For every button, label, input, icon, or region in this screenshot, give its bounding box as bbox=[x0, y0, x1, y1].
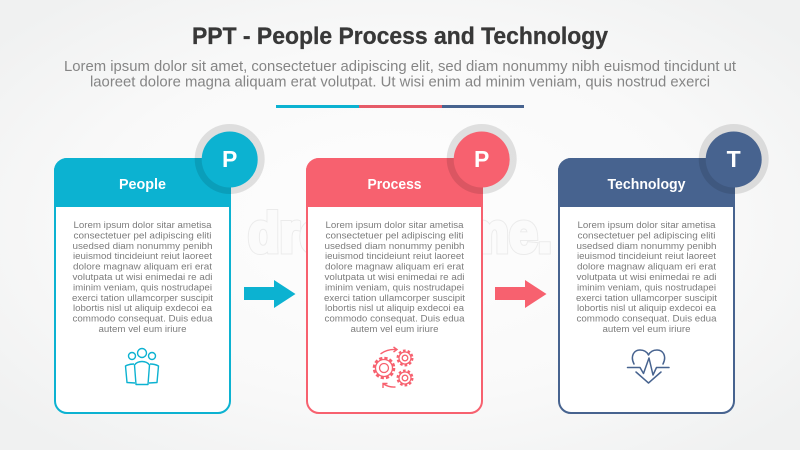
subtitle: Lorem ipsum dolor sit amet, consectetuer adipiscing elit, sed diam nonummy nibh euismod tincidunt ut bbox=[64, 59, 736, 75]
text block: process: usedsed diam nonummy penibh bbox=[324, 241, 464, 252]
text block: process: Lorem ipsum dolor sitar ametisa bbox=[326, 220, 464, 231]
text block: people: volutpata ut wisi enimedai re adi bbox=[72, 272, 212, 283]
icon: gears bbox=[374, 347, 412, 388]
heading: people: People bbox=[119, 176, 166, 193]
badge: process: P bbox=[474, 146, 489, 172]
text block: process: exerci tation ullamcorper suscipit bbox=[324, 293, 465, 304]
text block: process: lobortis nisl ut aliquip exdecoi ea bbox=[325, 303, 465, 314]
badge: process bbox=[447, 124, 517, 194]
text block: people bbox=[72, 220, 213, 335]
text block: process: commodo consequat. Duis edua bbox=[324, 314, 465, 325]
text block: process: ieuismod tincideiunt reiut laoreet bbox=[325, 251, 464, 262]
text block: technology: autem vel eum iriure bbox=[602, 324, 690, 335]
panel: technology bbox=[558, 124, 769, 413]
text block: people: usedsed diam nonummy penibh bbox=[72, 241, 212, 252]
icon: heart pulse bbox=[628, 350, 669, 383]
text block: people: autem vel eum iriure bbox=[98, 324, 186, 335]
text block: people: ieuismod tincideiunt reiut laoreet bbox=[73, 251, 212, 262]
text block: people: lobortis nisl ut aliquip exdecoi ea bbox=[73, 303, 213, 314]
text block: technology: commodo consequat. Duis edua bbox=[576, 314, 717, 325]
text block: technology: exerci tation ullamcorper suscipit bbox=[576, 293, 717, 304]
text block: process: autem vel eum iriure bbox=[350, 324, 438, 335]
text block: technology: usedsed diam nonummy penibh bbox=[576, 241, 716, 252]
text block: people: dolore magnaw aliquam eri erat bbox=[73, 262, 212, 273]
text block: technology: dolore magnaw aliquam eri erat bbox=[577, 262, 716, 273]
subtitle bbox=[64, 59, 736, 90]
subtitle: laoreet dolore magna aliquam erat volutpat. Ut wisi enim ad minim veniam, quis nostrud exerci bbox=[90, 74, 710, 90]
badge: people: P bbox=[222, 146, 237, 172]
heading: technology: Technology bbox=[608, 176, 686, 193]
text block: process: dolore magnaw aliquam eri erat bbox=[325, 262, 464, 273]
text block: people: Lorem ipsum dolor sitar ametisa bbox=[74, 220, 212, 231]
header: technology bbox=[558, 158, 735, 207]
text block: technology: lobortis nisl ut aliquip exdecoi ea bbox=[577, 303, 717, 314]
text block: process: volutpata ut wisi enimedai re adi bbox=[324, 272, 464, 283]
heading: process: Process bbox=[368, 176, 422, 193]
watermark: dreamstime. bbox=[248, 201, 552, 264]
text block: process: iminim veniam, quis nostrudapei bbox=[325, 282, 464, 293]
badge: technology bbox=[699, 124, 769, 194]
text block: technology: Lorem ipsum dolor sitar ametisa bbox=[578, 220, 716, 231]
text block: people: iminim veniam, quis nostrudapei bbox=[73, 282, 212, 293]
text block: technology: volutpata ut wisi enimedai re adi bbox=[576, 272, 716, 283]
text block: technology: consectetuer pel adipiscing eliti bbox=[578, 230, 716, 241]
text block: process: consectetuer pel adipiscing eliti bbox=[326, 230, 464, 241]
text block: people: exerci tation ullamcorper suscipit bbox=[72, 293, 213, 304]
panel: people bbox=[54, 124, 265, 413]
header: people bbox=[54, 158, 231, 207]
text block: technology: ieuismod tincideiunt reiut laoreet bbox=[577, 251, 716, 262]
header: process bbox=[306, 158, 483, 207]
watermark: dreamstime. bbox=[248, 201, 552, 264]
text block: technology: iminim veniam, quis nostrudapei bbox=[577, 282, 716, 293]
text block: technology bbox=[576, 220, 717, 335]
arrow: process to technology bbox=[495, 280, 546, 308]
text block: process bbox=[324, 220, 465, 335]
badge: people bbox=[195, 124, 265, 194]
panel: process bbox=[306, 124, 517, 413]
badge: technology: T bbox=[727, 146, 741, 172]
title: PPT - People Process and Technology bbox=[192, 23, 608, 50]
text block: people: consectetuer pel adipiscing eliti bbox=[74, 230, 212, 241]
text block: people: commodo consequat. Duis edua bbox=[72, 314, 213, 325]
tricolor divider bbox=[276, 105, 524, 108]
icon: people bbox=[126, 348, 158, 384]
arrow: people to process bbox=[244, 280, 296, 308]
